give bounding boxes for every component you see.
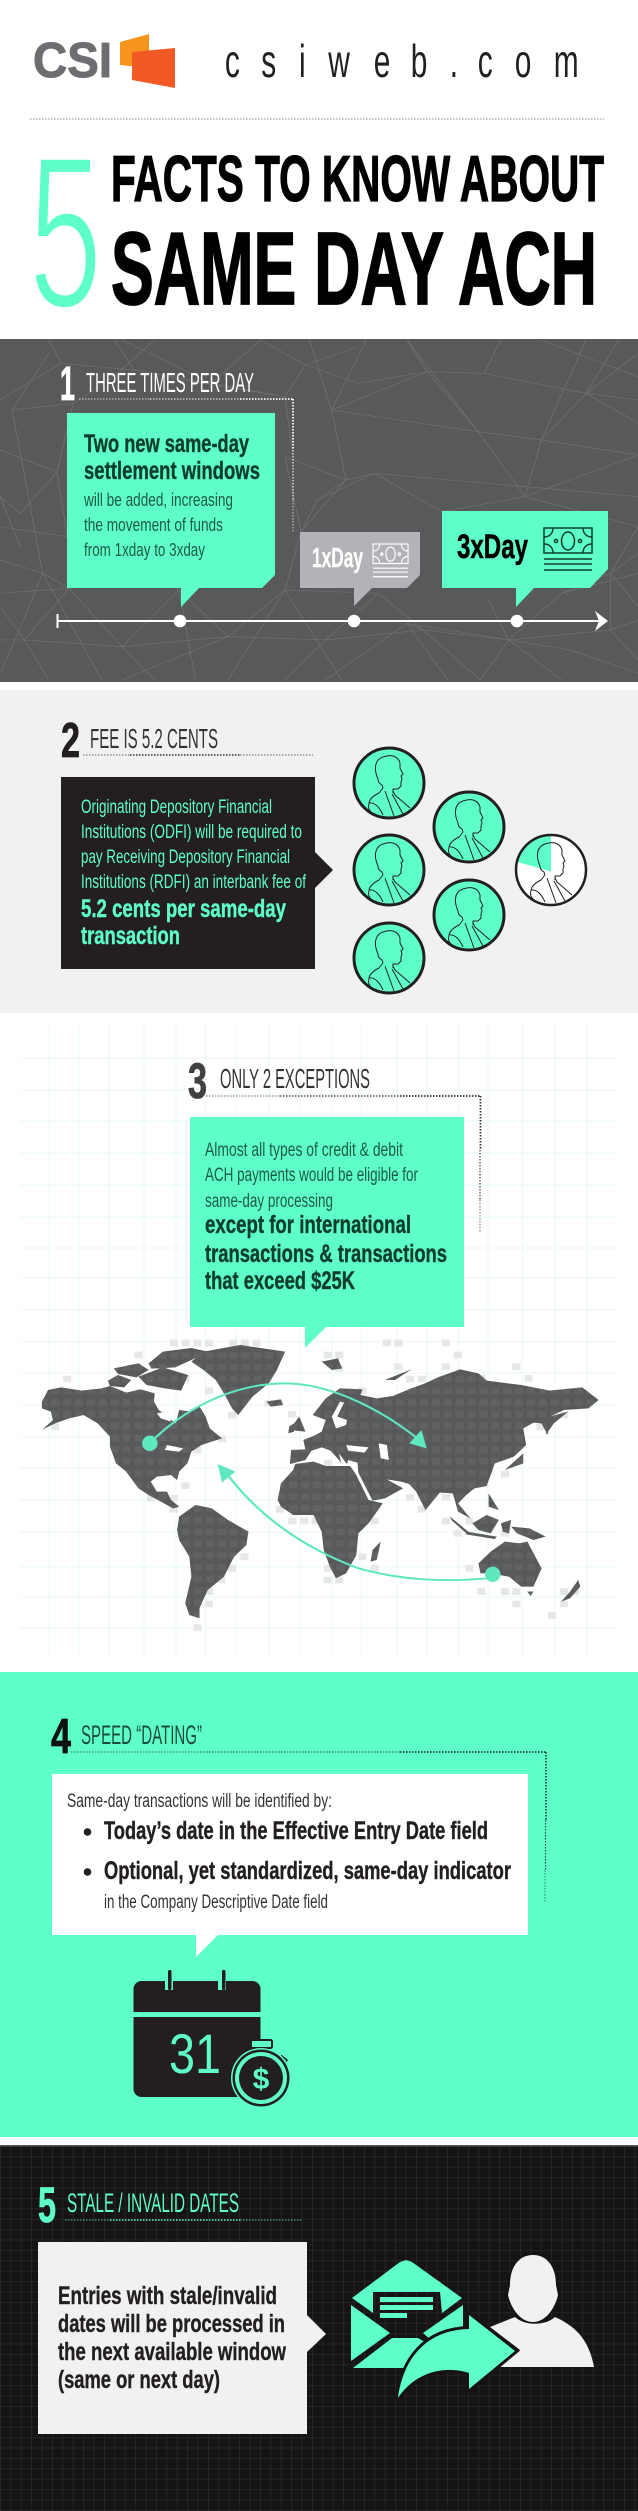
- panel: fact 1 three times per day: [0, 339, 638, 682]
- icon: calendar: 31: [169, 2022, 221, 2085]
- logo: CSI: CSI: [33, 34, 112, 88]
- arrow: forward: [398, 2315, 515, 2398]
- callout: stale entries: [38, 2242, 326, 2434]
- callout: stale entries: (same or next day): [58, 2366, 220, 2394]
- website address: csiweb.com: [225, 37, 579, 88]
- callout: two new windows: the movement of funds: [84, 514, 223, 535]
- icon: person: [490, 2255, 594, 2367]
- callout: 3xDay: [442, 511, 608, 607]
- heading number 4: 4: [51, 1710, 71, 1764]
- heading: speed dating: SPEED “DATING”: [81, 1720, 202, 1750]
- heading: fee: FEE IS 5.2 CENTS: [90, 723, 218, 754]
- callout: fee description: pay Receiving Depository Financial: [81, 847, 290, 868]
- callout: fee description: 5.2 cents per same-day: [81, 895, 286, 923]
- callout: 1xDay: 1xDay: [312, 542, 363, 573]
- logo: CSI: [33, 34, 175, 88]
- big number 5: 5: [29, 111, 102, 353]
- icon: five coins and a fraction: [354, 748, 586, 993]
- callout: 1xDay: [300, 532, 420, 606]
- callout: two new windows: from 1xday to 3xday: [84, 539, 206, 560]
- panel: fact 3 exceptions: [20, 1025, 618, 1655]
- callout: exceptions: ACH payments would be eligible for: [205, 1165, 418, 1186]
- callout: fee description: Institutions (ODFI) will be required to: [81, 822, 302, 843]
- callout: two new windows: settlement windows: [84, 457, 260, 485]
- callout: exceptions: that exceed $25K: [205, 1267, 355, 1295]
- heading number 3: 3: [188, 1053, 207, 1109]
- panel: fact 4 speed dating: [0, 1672, 638, 2137]
- callout: stale entries: the next available window: [58, 2338, 286, 2366]
- callout: stale entries: Entries with stale/invalid: [58, 2282, 277, 2310]
- world map: [42, 1340, 599, 1631]
- callout: two new windows: will be added, increasing: [83, 489, 233, 510]
- panel: fact 5 stale dates: [0, 2145, 638, 2511]
- callout: identifiers: Today’s date in the Effective Entry Date field: [104, 1817, 488, 1845]
- icon: envelope: [351, 2260, 463, 2368]
- callout: identifiers: Same-day transactions will be identified by:: [67, 1791, 332, 1812]
- callout: identifiers: in the Company Descriptive Date field: [104, 1892, 328, 1913]
- callout: fee description: Institutions (RDFI) an interbank fee of: [81, 872, 307, 893]
- callout: identifiers: [52, 1774, 528, 1957]
- callout: fee description: Originating Depository Financial: [81, 797, 272, 818]
- callout: fee description: transaction: [81, 922, 180, 950]
- panel: fact 2 fee: [0, 690, 638, 1013]
- icon: stopwatch: $: [253, 2063, 270, 2096]
- heading: three times per day: THREE TIMES PER DAY: [86, 367, 254, 398]
- timeline: [57, 611, 608, 631]
- header: [30, 34, 604, 119]
- callout: exceptions: transactions & transactions: [205, 1240, 447, 1268]
- heading number 2: 2: [61, 714, 80, 768]
- callout: exceptions: except for international: [205, 1211, 411, 1239]
- callout: two new windows: [67, 413, 275, 607]
- arrow: Australia to Atlantic: [218, 1464, 500, 1582]
- callout: fee description: [61, 777, 333, 969]
- callout: stale entries: dates will be processed in: [58, 2310, 285, 2338]
- arrow: North America to Asia: [142, 1383, 427, 1451]
- callout: two new windows: Two new same-day: [84, 430, 249, 458]
- icon: stopwatch: [231, 2040, 291, 2108]
- icon: calendar: [134, 1970, 260, 2097]
- heading number 1: 1: [60, 358, 75, 411]
- callout: exceptions: [190, 1117, 464, 1348]
- title: [29, 111, 604, 353]
- heading: stale dates: STALE / INVALID DATES: [67, 2188, 239, 2218]
- callout: exceptions: Almost all types of credit & debit: [205, 1140, 404, 1161]
- heading: only 2 exceptions: ONLY 2 EXCEPTIONS: [220, 1063, 370, 1094]
- callout: 3xDay: 3xDay: [457, 528, 528, 566]
- callout: exceptions: same-day processing: [205, 1191, 333, 1212]
- heading number 5: 5: [38, 2177, 56, 2233]
